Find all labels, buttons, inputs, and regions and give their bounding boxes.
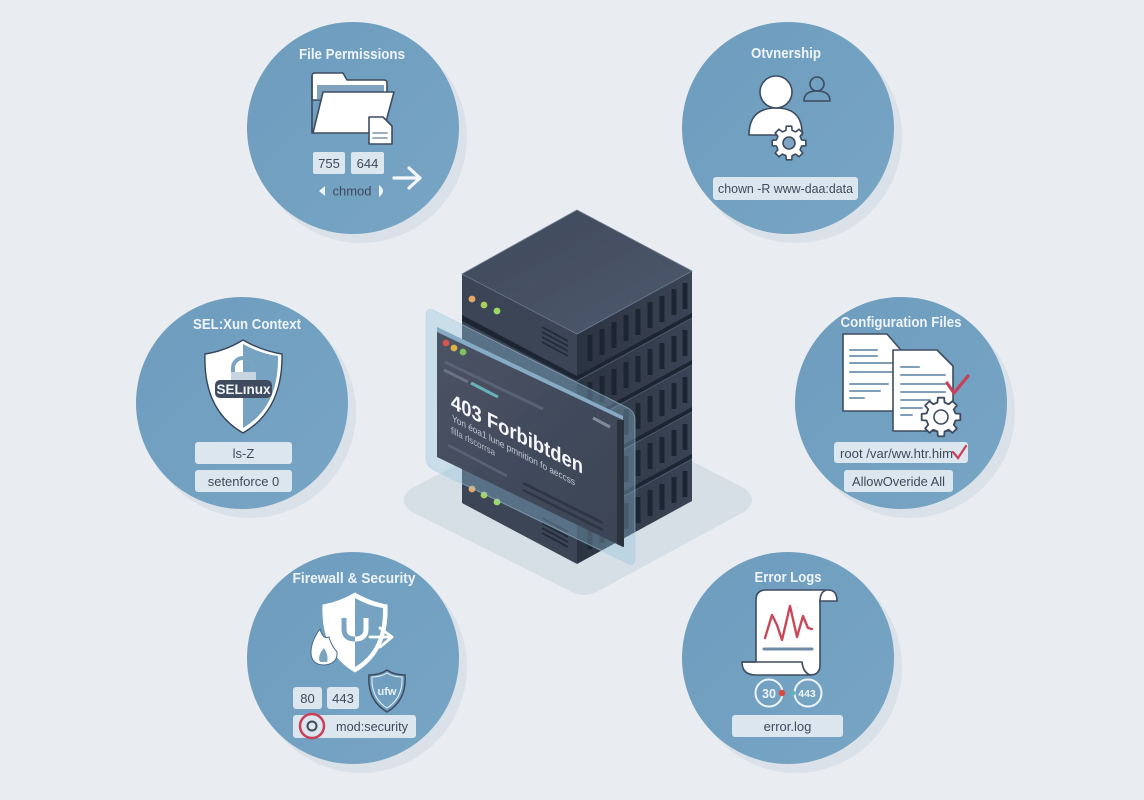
icon: main user bbox=[749, 76, 802, 135]
gauge: 80: 30 bbox=[762, 687, 776, 701]
chip: 755: 755 bbox=[318, 156, 340, 171]
command bar: chown -R www-daa:data bbox=[718, 181, 854, 196]
arrow bbox=[394, 168, 420, 188]
top status lights bbox=[469, 296, 500, 314]
heading: Error Logs bbox=[754, 569, 822, 586]
command: setenforce: setenforce 0 bbox=[208, 474, 279, 489]
icon: front document bbox=[893, 350, 953, 431]
window face bbox=[437, 332, 623, 547]
icon: flame bbox=[311, 629, 337, 665]
chip: 443 bbox=[327, 687, 359, 709]
icon: red check bbox=[947, 376, 968, 393]
command: root path: root /var/ww.htr.him bbox=[840, 446, 953, 461]
window side edge bbox=[617, 420, 624, 547]
panel: ownership bbox=[682, 22, 902, 243]
icon: shield bbox=[323, 593, 387, 672]
chip: 80 bbox=[293, 687, 322, 709]
icon: shield bbox=[205, 340, 282, 433]
icon: gear bbox=[772, 126, 806, 160]
arrow bbox=[370, 628, 392, 647]
command bar: error.log: error.log bbox=[764, 719, 811, 734]
command bar bbox=[713, 177, 858, 200]
chmod label bbox=[319, 184, 383, 198]
panel: selinux context bbox=[136, 297, 356, 518]
panel: error logs bbox=[682, 552, 902, 773]
icon: folder bbox=[312, 73, 394, 133]
command: root path bbox=[834, 442, 968, 463]
icon: document bbox=[369, 117, 392, 144]
403 window bbox=[437, 327, 624, 547]
floor platform under server bbox=[404, 408, 752, 595]
icon: gear bbox=[922, 398, 960, 436]
top vent bbox=[542, 327, 568, 356]
command: setenforce bbox=[195, 470, 292, 492]
command: allowoverride: AllowOveride All bbox=[852, 474, 945, 489]
server top plate bbox=[462, 210, 692, 334]
command: ls-Z bbox=[195, 442, 292, 464]
chip: 644: 644 bbox=[357, 156, 378, 171]
lock bbox=[231, 358, 256, 382]
log line bbox=[764, 648, 812, 650]
shield emblem bbox=[344, 618, 366, 639]
chmod label: chmod bbox=[332, 184, 372, 198]
window lower lines bbox=[448, 445, 603, 530]
chip: 755 bbox=[313, 152, 345, 174]
selinux label: SELınux bbox=[216, 382, 271, 397]
gauge: 80 bbox=[756, 680, 782, 706]
window message: Yon éoa1 lune pmnition fo aeccss bbox=[452, 414, 575, 488]
command bar: mod security: mod:security bbox=[336, 719, 408, 734]
server stack bbox=[462, 210, 692, 564]
heading: Otvnership bbox=[751, 45, 821, 62]
heading: Firewall & Security bbox=[292, 570, 416, 587]
command bar: mod security bbox=[293, 714, 416, 738]
glass panel bbox=[426, 309, 635, 564]
heading: Configuration Files bbox=[840, 314, 962, 331]
window heading: 403 Forbibtden bbox=[451, 389, 583, 479]
gauge: 443 bbox=[794, 680, 822, 706]
command: allowoverride bbox=[844, 470, 953, 492]
chip: 644 bbox=[351, 152, 384, 174]
panel: file permissions bbox=[247, 22, 467, 243]
icon: back document bbox=[843, 334, 900, 411]
icon: log scroll bbox=[742, 590, 837, 675]
icon: ufw shield: ufw bbox=[378, 686, 397, 698]
icon: secondary user bbox=[804, 77, 830, 101]
icon: ufw shield bbox=[369, 670, 405, 712]
command bar: error.log bbox=[732, 715, 843, 737]
command: ls-Z: ls-Z bbox=[233, 446, 254, 461]
gauge: 443: 443 bbox=[798, 688, 816, 700]
heading: SEL:Xun Context bbox=[193, 316, 301, 333]
status dots bbox=[779, 690, 796, 696]
chip: 443: 443 bbox=[332, 691, 354, 706]
window top band bbox=[437, 327, 623, 424]
panel: firewall and security bbox=[247, 552, 467, 773]
bottom vent bbox=[542, 518, 568, 547]
central server stack with 403 window bbox=[426, 210, 692, 564]
bottom status lights bbox=[469, 486, 500, 505]
address bars bbox=[444, 362, 610, 427]
window controls bbox=[443, 340, 466, 355]
window message line 2: filla rlscorrsa bbox=[451, 426, 495, 459]
log chart bbox=[765, 606, 812, 640]
panel: configuration files bbox=[795, 297, 1015, 518]
heading: File Permissions bbox=[299, 46, 405, 63]
chip: 80: 80 bbox=[300, 691, 315, 706]
